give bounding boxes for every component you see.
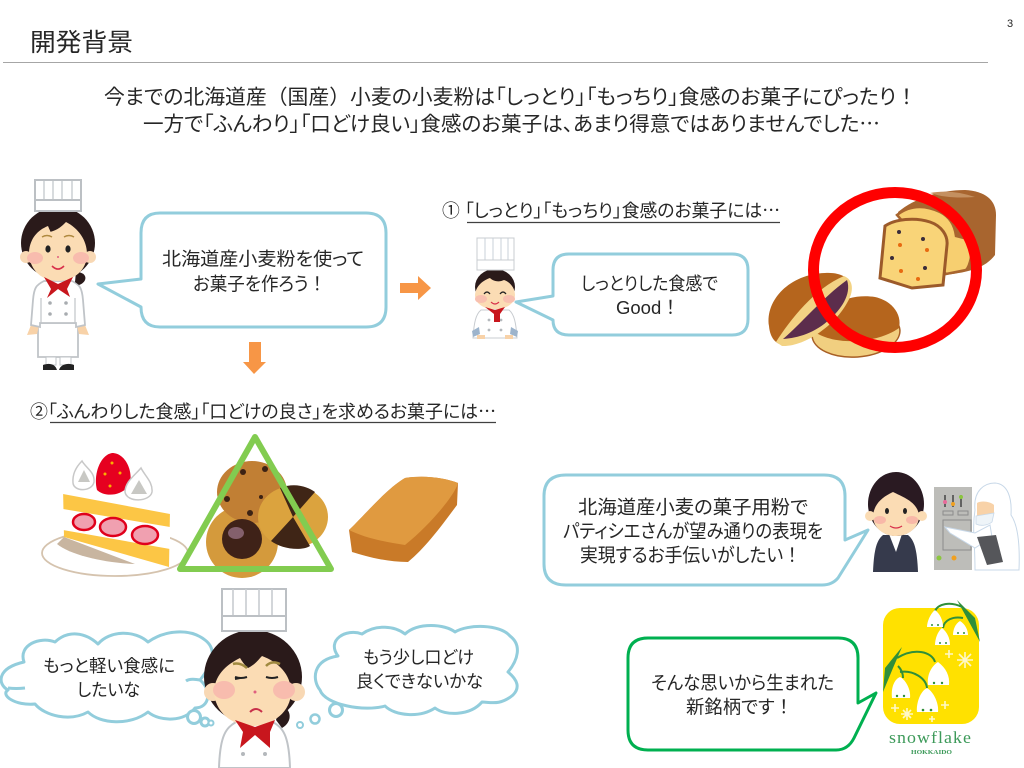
section heading 1: ① 「しっとり」「もっちり」食感のお菓子には…: [442, 197, 780, 223]
green triangle mark: [180, 437, 331, 569]
speech bubble: patissier support: 北海道産小麦の菓子用粉で: [578, 496, 808, 518]
intro text: [104, 80, 917, 137]
speech bubble: new brand: そんな思いから生まれた: [651, 672, 834, 694]
speech bubble: patissier support: [544, 475, 868, 585]
page number: 3: [1007, 18, 1013, 30]
red circle mark: [814, 192, 976, 348]
icon: standing chef: [20, 180, 96, 370]
arrow: right: [400, 276, 431, 300]
logo: snowflake Hokkaido: snowflake: [889, 728, 972, 747]
thought cloud: right: [297, 626, 517, 728]
thought cloud: right: 良くできないかな: [356, 672, 483, 692]
thought cloud: left: [1, 632, 214, 726]
arrow: down: [243, 342, 266, 374]
icon: factory worker at control panel: [934, 483, 1019, 570]
logo: snowflake Hokkaido: HOKKAIDO: [911, 750, 952, 756]
speech bubble: new brand: [628, 638, 876, 750]
intro text: 今までの北海道産（国産）小麦の小麦粉は「しっとり」「もっちり」食感のお菓子にぴったり ！: [104, 80, 917, 110]
speech bubble: new brand: 新銘柄です！: [686, 694, 793, 720]
thought cloud: left: もっと軽い食感に: [43, 656, 175, 676]
speech bubble: patissier support: パティシエさんが望み通りの表現を: [563, 520, 823, 542]
thought cloud: left: したいな: [77, 680, 140, 700]
speech bubble: first idea: お菓子を作ろう！: [193, 270, 326, 296]
speech bubble: patissier support: 実現するお手伝いがしたい！: [580, 540, 801, 568]
section heading 2: ②「ふんわりした食感」「口どけの良さ」を求めるお菓子には…: [30, 398, 496, 424]
intro text: 一方で「ふんわり」「口どけ良い」食感のお菓子は、あまり得意ではありませんでした…: [143, 107, 880, 137]
icon: shortcake: [42, 453, 188, 576]
speech bubble: first idea: [98, 213, 386, 327]
icon: financier: [349, 477, 458, 562]
logo: snowflake Hokkaido: [883, 600, 980, 756]
speech bubble: moist texture: [516, 254, 748, 335]
speech bubble: moist texture: しっとりした食感で: [581, 274, 718, 294]
icon: office woman: [865, 472, 927, 572]
speech bubble: first idea: 北海道産小麦粉を使って: [162, 248, 364, 270]
thought cloud: right: もう少し口どけ: [363, 648, 474, 668]
speech bubble: moist texture: Good！: [616, 294, 680, 320]
icon: troubled chef: [204, 589, 305, 768]
icon: smiling chef: [472, 238, 518, 339]
icon: pound cake: [880, 190, 996, 288]
title: 開発背景: [30, 29, 133, 57]
icon: dorayaki: [769, 273, 902, 360]
icon: cookies: [206, 461, 328, 578]
